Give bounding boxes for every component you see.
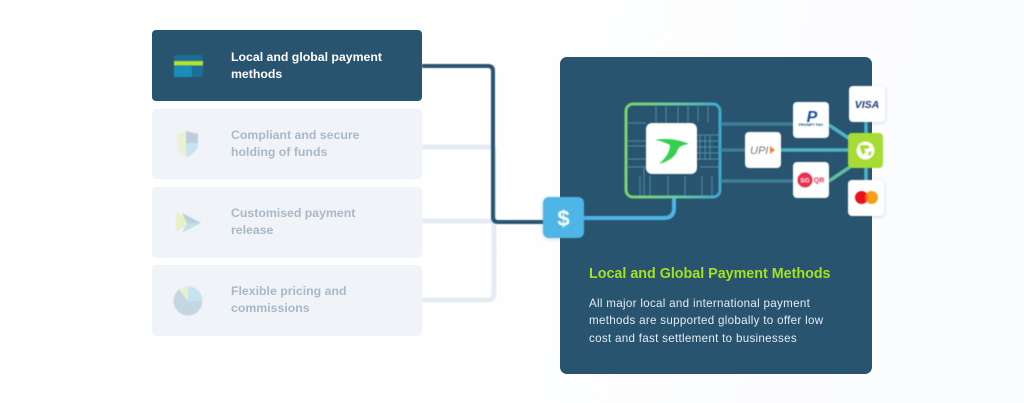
dollar badge: $	[557, 206, 570, 231]
icon: payment card	[173, 54, 204, 78]
text: card label: Flexible pricing and	[231, 284, 346, 298]
tile: PayPal: PROMPT PAY	[799, 123, 824, 127]
text: card label: Compliant and secure	[231, 128, 359, 142]
globe hub	[848, 133, 883, 168]
tile: VISA: VISA	[855, 99, 879, 111]
tile: PayPal	[793, 102, 829, 138]
icon: shield	[176, 130, 198, 157]
text: card label	[231, 50, 382, 81]
text: card label	[231, 128, 359, 159]
text: card label	[231, 284, 346, 315]
chip circuit	[626, 86, 885, 216]
tile: VISA	[849, 86, 885, 122]
detail body text: methods are supported globally to offer low	[589, 314, 823, 327]
panel: customised payment release card	[152, 187, 422, 258]
panel: detail background	[560, 57, 872, 374]
logo tile	[646, 123, 697, 174]
text: card label	[231, 206, 356, 237]
icon: pie chart	[173, 286, 203, 316]
logo mark	[655, 139, 689, 164]
text: card label: Local and global payment	[231, 50, 382, 64]
text: card label: Customised payment	[231, 206, 355, 220]
text: card label: commissions	[231, 301, 310, 315]
tile: SGQR: QR	[814, 178, 824, 184]
connector: badge to chip	[580, 196, 674, 218]
tile: UPI	[745, 132, 781, 168]
panel: local and global payment methods card	[152, 30, 422, 101]
tile: PayPal: P	[807, 109, 818, 126]
icon: play arrows	[176, 212, 201, 233]
connector: active dark line	[422, 66, 548, 222]
detail body text: All major local and international payment	[589, 297, 810, 310]
text: card label: holding of funds	[231, 145, 327, 159]
tile: SGQR	[793, 162, 829, 198]
chip outline	[626, 104, 720, 197]
tile: UPI: UPI	[750, 145, 768, 157]
text: card label: methods	[231, 67, 282, 81]
panel: flexible pricing card	[152, 265, 422, 336]
tile: Mastercard	[848, 180, 884, 216]
panel: compliant and secure holding card	[152, 109, 422, 179]
text: card label: release	[231, 223, 273, 237]
connector: inactive lines	[422, 147, 494, 300]
chip inner traces	[628, 106, 719, 196]
tile: SGQR: SG	[800, 178, 810, 184]
detail body text	[589, 297, 824, 345]
detail heading: Local and Global Payment Methods	[589, 266, 830, 282]
detail body text: cost and fast settlement to businesses	[589, 332, 797, 345]
links from chip to methods	[721, 120, 866, 182]
dollar badge	[543, 197, 584, 238]
